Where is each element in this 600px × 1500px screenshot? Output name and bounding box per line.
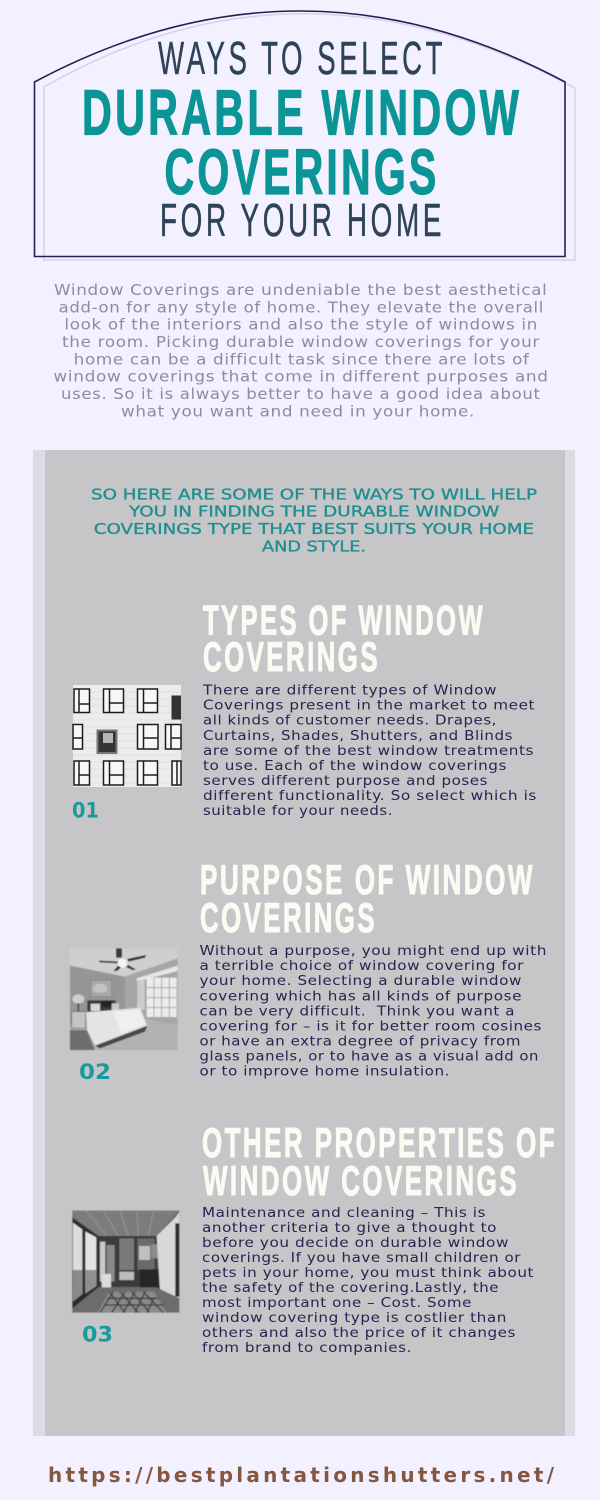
panel: content background [33,450,575,1436]
body text: other properties: coverings. If you have small children or [202,1250,521,1266]
heading: types of window coverings [203,596,485,680]
intro paragraph: window coverings that come in different purposes and [53,368,549,386]
intro paragraph: look of the interiors and also the style of windows in [64,316,538,334]
body text: purpose: covering for – is it for better room cosines [200,1018,542,1034]
body text: other properties: before you decide on durable window [202,1235,509,1251]
body text: purpose: or to improve home insulation. [200,1064,450,1080]
body text: purpose: glass panels, or to have as a visual add on [200,1048,539,1064]
lead-in text: SO HERE ARE SOME OF THE WAYS TO WILL HELP [91,485,537,503]
body text: types: There are different types of Window [202,682,497,698]
body text: types: Coverings present in the market to meet [203,698,535,714]
arch title frame [34,11,575,260]
lead-in text: YOU IN FINDING THE DURABLE WINDOW [128,503,500,521]
heading: purpose of window coverings: COVERINGS [200,894,377,941]
lead-in text [91,485,537,555]
section 2: purpose of window coverings [70,856,547,1084]
body text: other properties: from brand to companies. [202,1340,412,1356]
intro paragraph: the room. Picking durable window coverings for your [62,333,540,351]
intro paragraph: home can be a difficult task since there are lots of [74,350,530,368]
number 02: 02 [79,1060,111,1084]
body text: purpose: covering which has all kinds of purpose [200,988,522,1004]
intro paragraph [53,281,549,420]
photo: sunroom with patterned rug [72,1211,179,1313]
body text: types: all kinds of customer needs. Drapes, [203,713,497,729]
body text: other properties: pets in your home, you must think about [202,1265,534,1281]
lead-in text: AND STYLE. [262,537,366,555]
body text: other properties: others and also the price of it changes [202,1325,516,1341]
intro paragraph: uses. So it is always better to have a good idea about [61,385,541,403]
body text: types: serves different purpose and poses [203,773,488,789]
body text: other properties: Maintenance and cleaning – This is [202,1205,486,1221]
number 03: 03 [82,1322,113,1346]
body text: types: Curtains, Shades, Shutters, and Blinds [203,728,513,744]
photo: building facade with windows [73,685,181,787]
intro paragraph: Window Coverings are undeniable the best aesthetical [54,281,548,299]
intro paragraph: add-on for any style of home. They elevate the overall [59,298,544,316]
body text: types: suitable for your needs. [203,803,393,819]
footer url: https://bestplantationshutters.net/ [48,1463,555,1487]
body text: types: are some of the best window treatments [203,743,534,759]
body text: purpose: or have an extra degree of privacy from [200,1034,521,1050]
body text: purpose: Without a purpose, you might end up with [200,943,547,959]
section 3: other properties of window coverings [72,1119,557,1356]
heading: purpose of window coverings [200,856,535,941]
body text: purpose: can be very difficult. Think you want a [200,1003,515,1019]
number 01: 01 [72,798,99,822]
body text: types [202,682,537,819]
body text: purpose: a terrible choice of window covering for [200,958,524,974]
photo: bedroom with ceiling fan [70,948,178,1050]
title: COVERINGS [164,136,440,208]
intro paragraph: what you want and need in your home. [121,402,475,420]
body text: other properties: another criteria to give a thought to [202,1220,497,1236]
body text: types: different functionality. So select which is [203,788,537,804]
heading: types of window coverings: COVERINGS [203,633,380,680]
heading: other properties of window coverings [202,1119,557,1204]
body text: other properties: most important one – Cost. Some [202,1295,472,1311]
body text: other properties: window covering type is costlier than [202,1310,507,1326]
body text: purpose: your home. Selecting a durable window [200,973,522,989]
body text: other properties: the safety of the covering.Lastly, the [202,1280,499,1296]
body text: other properties [202,1205,534,1356]
lead-in text: COVERINGS TYPE THAT BEST SUITS YOUR HOME [94,520,534,538]
body text: types: to use. Each of the window coverings [203,758,507,774]
title [82,32,522,246]
section 1: types of window coverings [72,596,537,822]
body text: purpose [200,943,547,1080]
